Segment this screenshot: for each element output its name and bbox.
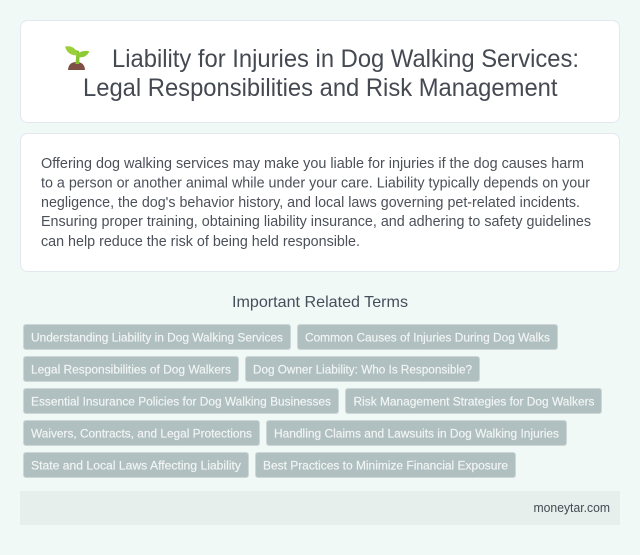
tag — [24, 356, 238, 382]
tag: State and Local Laws Affecting Liability — [31, 458, 242, 472]
description text: can help reduce the risk of being held responsible. — [41, 234, 360, 250]
heading: important related terms: Important Related Terms — [232, 294, 408, 311]
panel: title header — [20, 20, 620, 122]
title: Legal Responsibilities and Risk Management — [83, 75, 558, 102]
description text: Offering dog walking services may make you liable for injuries if the dog causes harm — [41, 156, 584, 172]
tag: Handling Claims and Lawsuits in Dog Walking Injuries — [274, 426, 559, 440]
title: Liability for Injuries in Dog Walking Services: — [112, 46, 579, 73]
icon: sprout — [65, 46, 90, 70]
tag: Dog Owner Liability: Who Is Responsible? — [253, 362, 472, 376]
tag: Best Practices to Minimize Financial Exposure — [263, 458, 508, 472]
tag: Common Causes of Injuries During Dog Walks — [305, 330, 550, 344]
tag: Waivers, Contracts, and Legal Protections — [31, 426, 252, 440]
description text: Ensuring proper training, obtaining liability insurance, and adhering to safety guidelines — [41, 214, 591, 230]
footer source text: moneytar.com — [534, 501, 610, 515]
tag: Understanding Liability in Dog Walking Services — [31, 330, 283, 344]
tag: Legal Responsibilities of Dog Walkers — [31, 362, 231, 376]
panel: description — [20, 134, 620, 272]
tag — [256, 452, 516, 478]
tag — [24, 452, 248, 478]
tag — [24, 324, 290, 350]
tag — [266, 420, 566, 446]
tag — [24, 388, 338, 414]
footer — [20, 491, 620, 525]
tag — [24, 420, 260, 446]
description text: to a person or another animal while under your care. Liability typically depends on your — [41, 176, 590, 192]
tag — [346, 388, 602, 414]
description text: negligence, the dog's behavior history, and local laws governing pet-related incidents. — [41, 195, 580, 211]
tag — [298, 324, 558, 350]
tag: Essential Insurance Policies for Dog Walking Businesses — [31, 394, 331, 408]
tag: Risk Management Strategies for Dog Walkers — [354, 394, 594, 408]
description text — [41, 156, 591, 250]
tag list — [24, 324, 602, 478]
tag — [246, 356, 480, 382]
title — [83, 46, 579, 102]
